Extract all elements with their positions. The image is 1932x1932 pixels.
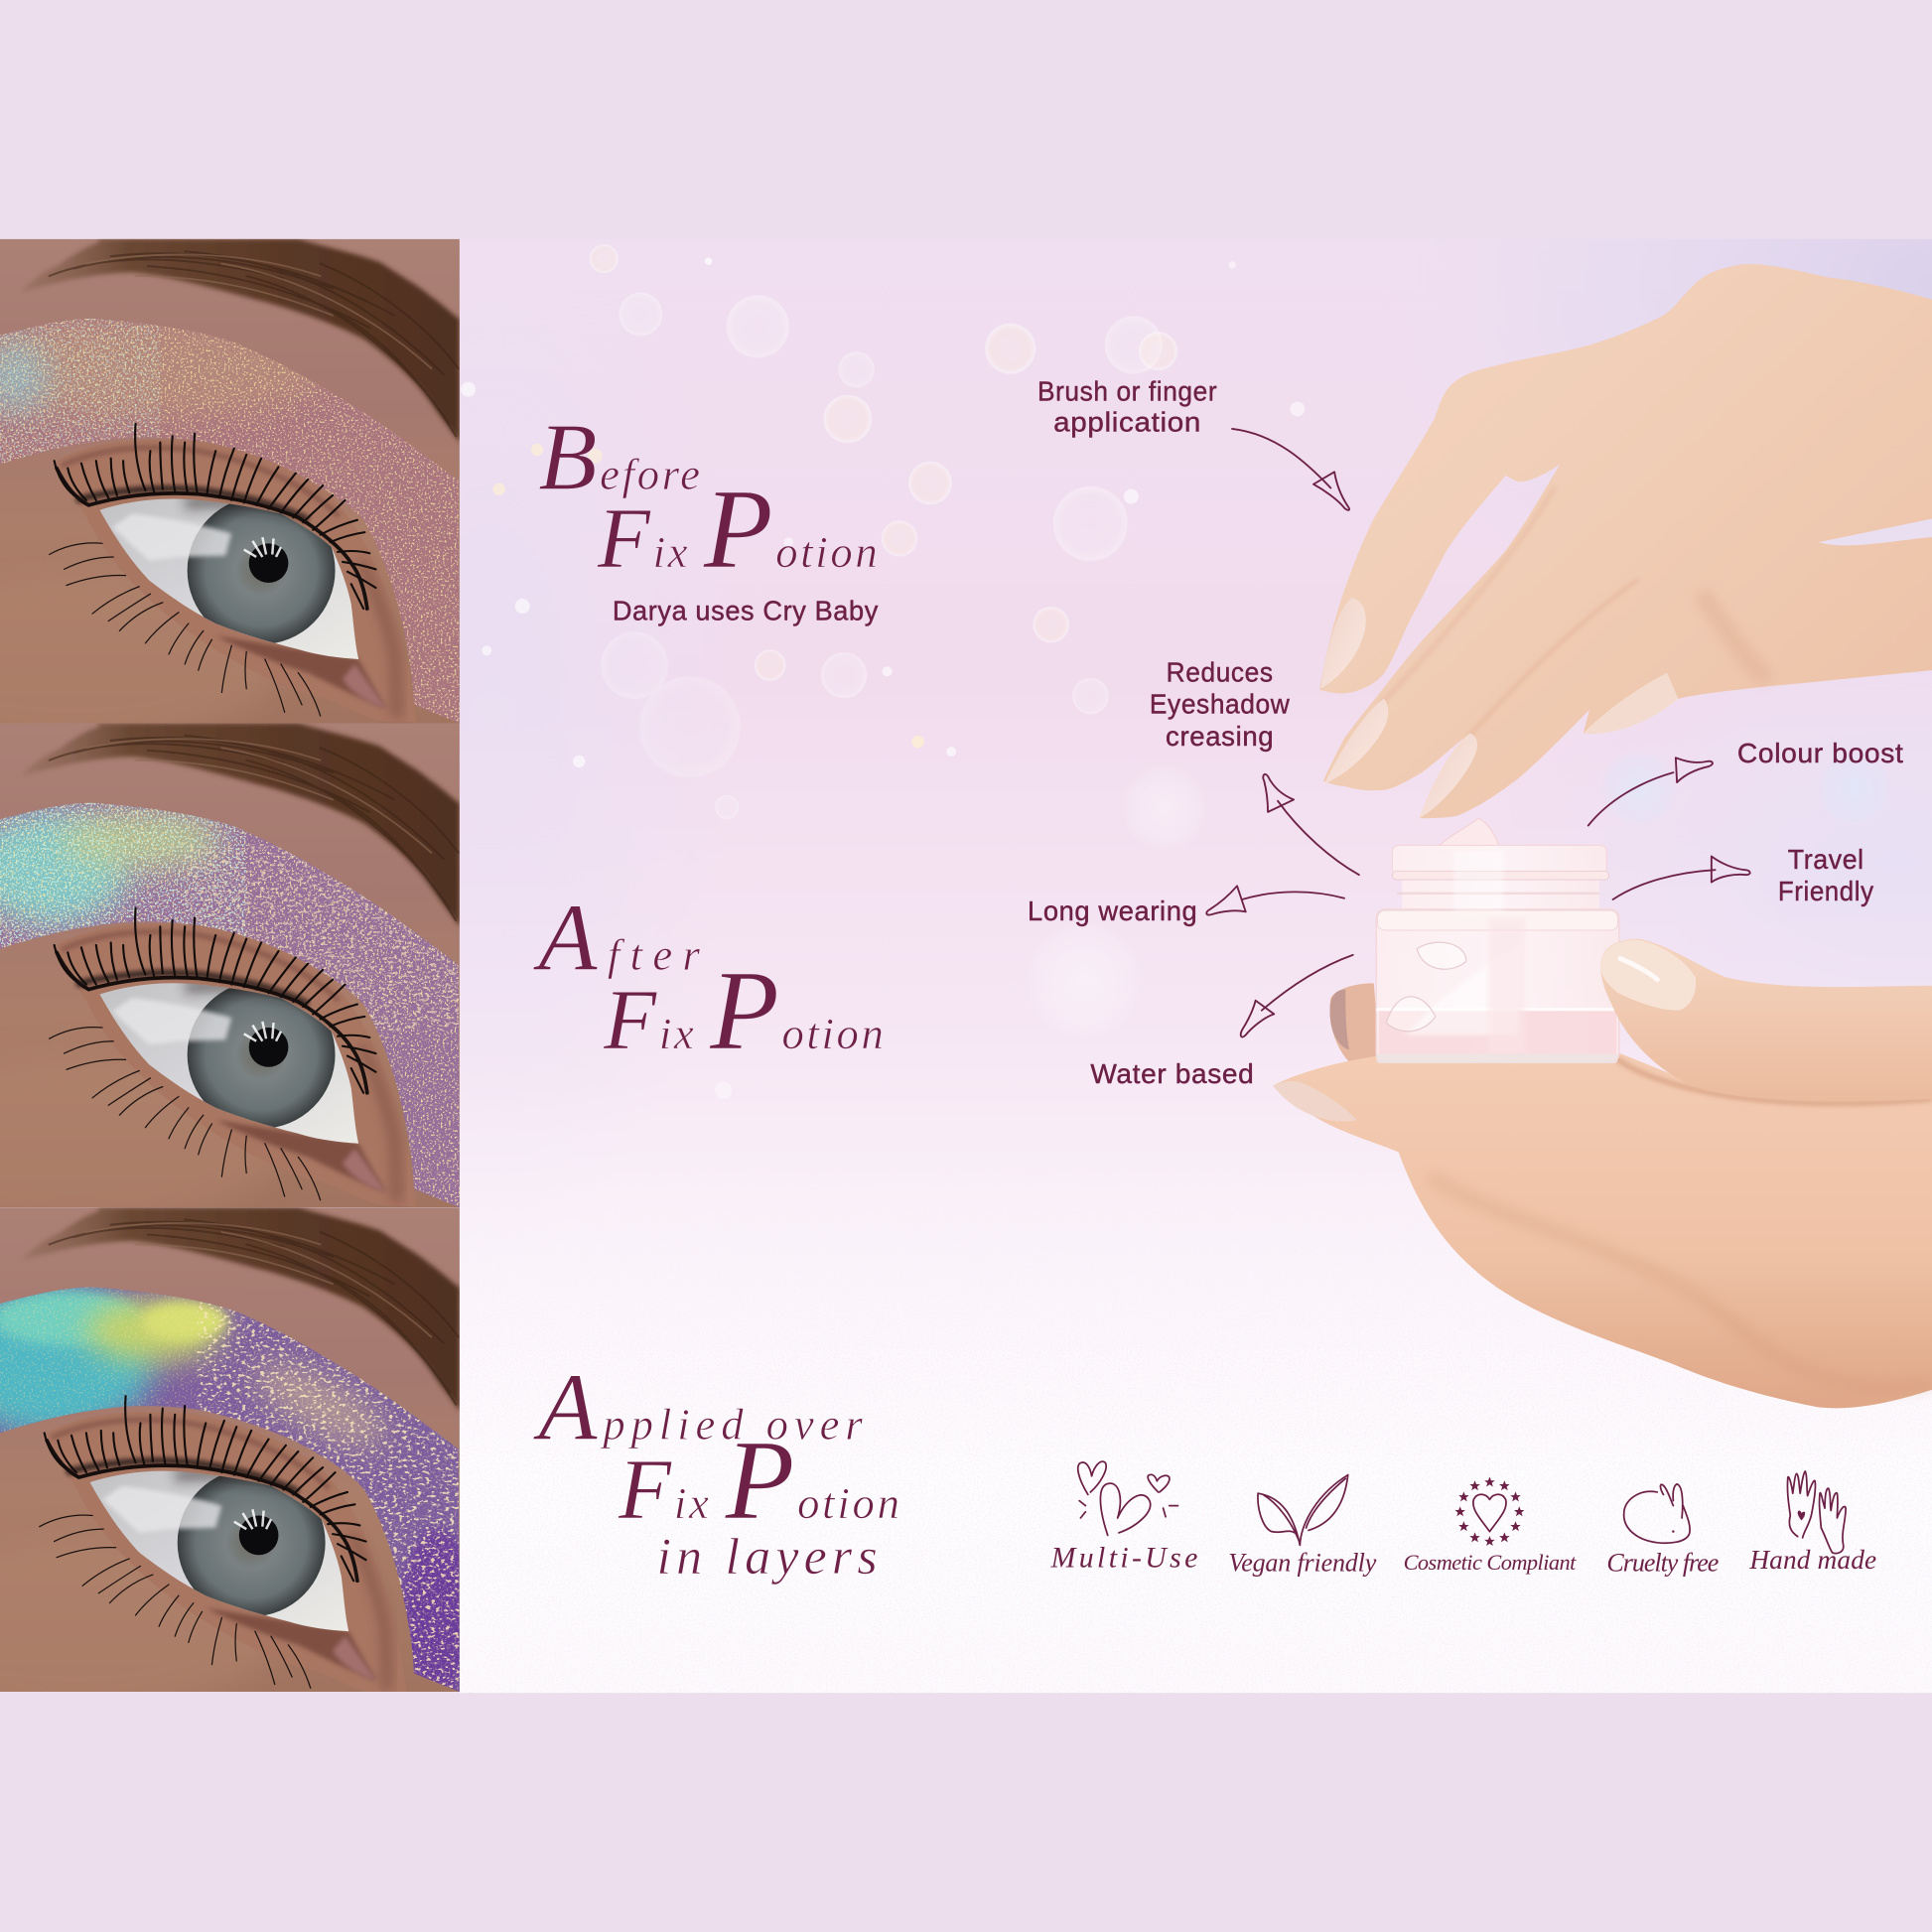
heading: Before Fix Potion xyxy=(538,404,878,592)
arrow: long wearing xyxy=(1206,886,1344,915)
arrow: brush xyxy=(1232,429,1349,510)
heading: Applied over Fix Potion in layers: in layers xyxy=(656,1529,878,1586)
icon: Cosmetic Compliant heart and stars: Cosmetic Compliant xyxy=(1404,1550,1577,1575)
heading: Applied over Fix Potion in layers: Fix Potion xyxy=(618,1417,899,1543)
icon: Hand made hands: Hand made xyxy=(1748,1545,1876,1575)
callout: Travel Friendly xyxy=(1778,844,1874,906)
callout: Colour boost: Colour boost xyxy=(1737,738,1903,768)
image: upper hand pinching gel xyxy=(1319,264,1932,818)
image: thumb over jar xyxy=(1600,939,1932,1101)
icon: Cruelty free rabbit xyxy=(1606,1484,1719,1577)
callout: Brush or finger application: application xyxy=(1053,406,1201,437)
icon: Cruelty free rabbit: Cruelty free xyxy=(1606,1548,1719,1577)
callout: Travel Friendly: Travel xyxy=(1788,844,1864,875)
panel: eye before xyxy=(0,239,460,745)
callout: Reduces Eyeshadow creasing: Reduces xyxy=(1167,656,1274,687)
callout: Water based: Water based xyxy=(1090,1058,1254,1089)
panel: eye after xyxy=(0,724,460,1228)
image: glass jar with gel xyxy=(1376,818,1619,1063)
arrow: colour boost xyxy=(1588,758,1713,826)
heading: Applied over Fix Potion in layers xyxy=(532,1354,899,1586)
icons row xyxy=(1050,1461,1876,1577)
icon: Multi-Use hearts: Multi-Use xyxy=(1050,1542,1197,1575)
heading: Before Fix Potion: Fix Potion xyxy=(597,466,878,592)
arrow: creasing xyxy=(1263,774,1359,875)
icon: Hand made hands xyxy=(1748,1471,1876,1575)
icon: Vegan friendly leaves xyxy=(1228,1475,1377,1577)
image: hand holding jar (palm under jar) xyxy=(1273,983,1932,1408)
callout: Long wearing: Long wearing xyxy=(1028,896,1197,926)
panel: eye applied over Fix Potion in layers xyxy=(0,1207,475,1713)
text: Darya uses Cry Baby: Darya uses Cry Baby xyxy=(613,595,879,625)
callout: Brush or finger application xyxy=(1037,375,1217,437)
callout: Reduces Eyeshadow creasing: creasing xyxy=(1166,721,1274,752)
heading: Before Fix Potion: Before xyxy=(538,404,700,510)
callout: Reduces Eyeshadow creasing: Eyeshadow xyxy=(1150,689,1290,720)
panel: sparkling background xyxy=(460,239,1932,1693)
heading: After Fix Potion: Fix Potion xyxy=(603,947,884,1073)
heading: After Fix Potion xyxy=(532,885,884,1073)
arrow: travel friendly xyxy=(1613,857,1750,899)
icon: Vegan friendly leaves: Vegan friendly xyxy=(1228,1548,1377,1577)
callout: Brush or finger application: Brush or finger xyxy=(1037,375,1217,406)
icon: Multi-Use hearts xyxy=(1050,1461,1197,1575)
icon: Cosmetic Compliant heart and stars xyxy=(1404,1477,1577,1575)
arrow: water based xyxy=(1241,955,1353,1037)
callout: Travel Friendly: Friendly xyxy=(1778,876,1874,906)
callout: Reduces Eyeshadow creasing xyxy=(1150,656,1290,752)
heading: Applied over Fix Potion in layers: Applied over xyxy=(532,1354,863,1460)
heading: After Fix Potion: A fter xyxy=(532,885,701,991)
